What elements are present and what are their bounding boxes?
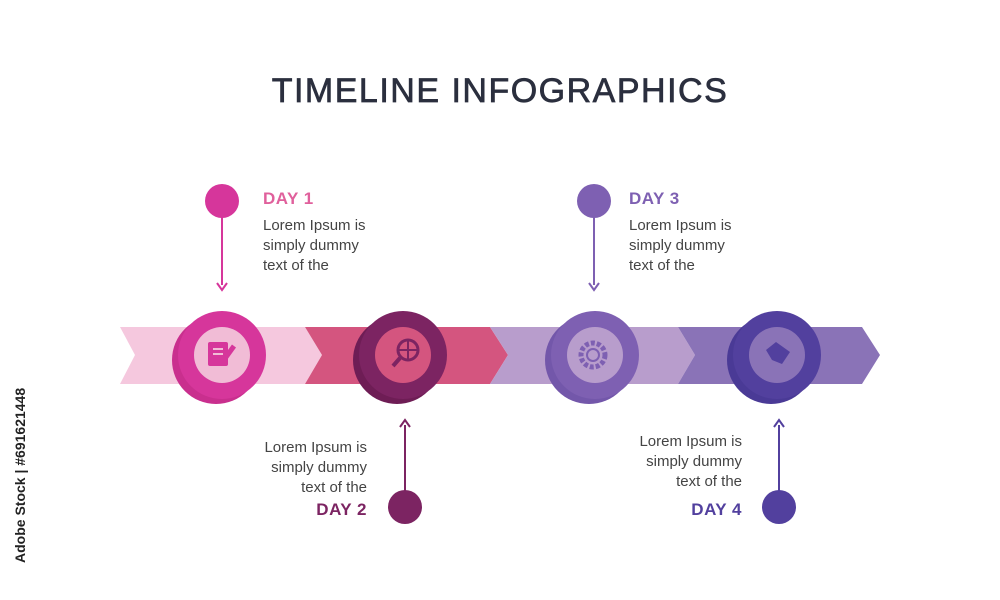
day 3 heading: DAY 3 — [629, 189, 680, 208]
step 2 circle with globe icon — [353, 311, 447, 404]
day 4 text: Lorem Ipsum is — [639, 433, 742, 450]
day 1 text: Lorem Ipsum is — [263, 217, 366, 234]
day 1 text — [263, 217, 366, 274]
step 3 circle with gear icon — [545, 311, 639, 404]
day 3 text: Lorem Ipsum is — [629, 217, 732, 234]
title: TIMELINE INFOGRAPHICS — [272, 72, 728, 110]
day 4 text — [639, 433, 742, 490]
day 4 heading: DAY 4 — [691, 500, 742, 519]
day 3 text: simply dummy — [629, 237, 725, 254]
pin 2 — [388, 420, 422, 524]
day 2 text: text of the — [301, 479, 367, 496]
day 1 text: text of the — [263, 257, 329, 274]
day 1 heading: DAY 1 — [263, 189, 314, 208]
day 2 heading: DAY 2 — [316, 500, 367, 519]
pin 1 — [205, 184, 239, 290]
day 3 text: text of the — [629, 257, 695, 274]
day 3 text — [629, 217, 732, 274]
step 4 circle with handshake icon — [727, 311, 821, 404]
day 4 text: text of the — [676, 473, 742, 490]
day 1 text: simply dummy — [263, 237, 359, 254]
day 2 text — [264, 439, 367, 496]
day 4 text: simply dummy — [646, 453, 742, 470]
step 1 circle with document icon — [172, 311, 266, 404]
pin 3 — [577, 184, 611, 290]
arrow segments — [120, 327, 880, 384]
day 2 text: simply dummy — [271, 459, 367, 476]
side credit: Adobe Stock | #691621448 — [12, 388, 28, 563]
day 2 text: Lorem Ipsum is — [264, 439, 367, 456]
pin 4 — [762, 420, 796, 524]
